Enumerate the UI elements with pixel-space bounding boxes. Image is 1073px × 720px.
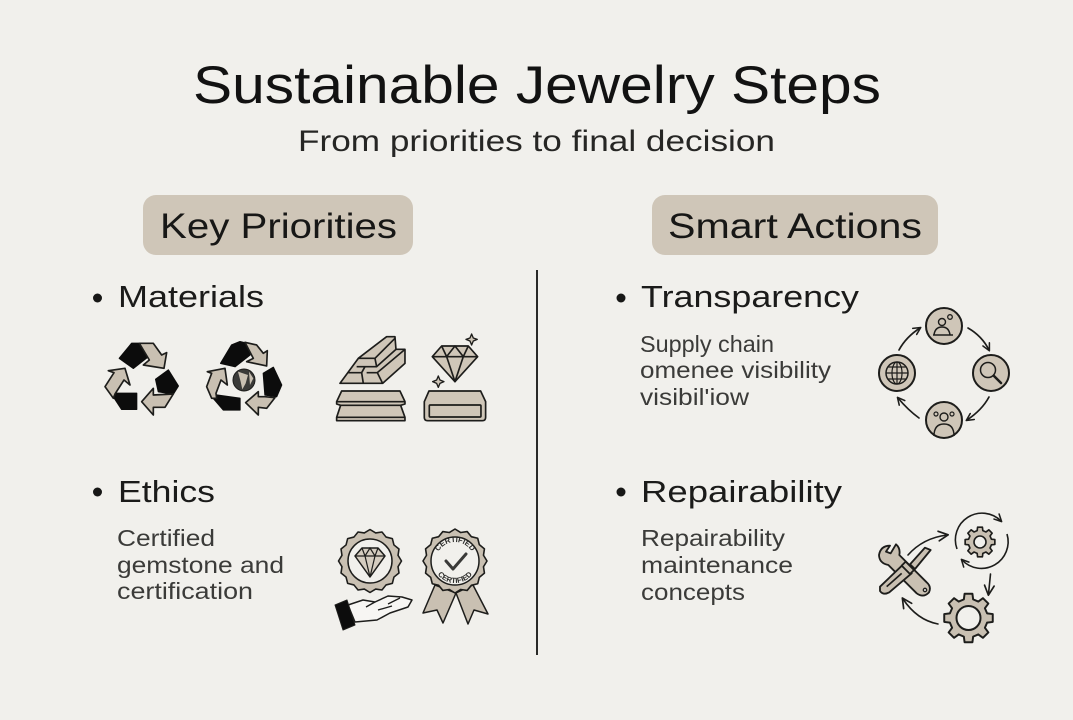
icon: open hand (335, 596, 412, 630)
arrows: repair cycle (903, 535, 990, 624)
body text: repairability: Repairability (641, 525, 785, 551)
body text: repairability: concepts (641, 579, 745, 605)
panel: repairability (616, 474, 1008, 642)
body text: transparency (640, 331, 831, 410)
body text: transparency: omenee visibility (640, 357, 831, 383)
heading: Key Priorities (143, 195, 413, 255)
icon: magnifier node (973, 355, 1009, 391)
body text: repairability: maintenance (641, 552, 793, 578)
heading: repairability: Repairability (641, 474, 843, 509)
heading: Smart Actions (652, 195, 938, 255)
icon: globe node (879, 355, 915, 391)
bullet: ethics (93, 488, 102, 496)
heading: Smart Actions: Smart Actions (668, 207, 922, 246)
bullet: materials (93, 294, 102, 302)
body text: repairability (641, 525, 793, 605)
body text: ethics (117, 525, 284, 604)
icon: crossed wrench and screwdriver (879, 544, 931, 596)
icon: flat ingot (337, 391, 405, 421)
heading: ethics: Ethics (118, 474, 215, 509)
panel: ethics (93, 474, 489, 630)
icon: people node (926, 402, 962, 438)
body text: transparency: visibil'iow (640, 384, 750, 410)
panel: transparency (616, 279, 1009, 438)
icon: diamond seal (338, 530, 402, 592)
icon: diamond with sparkles (432, 334, 478, 387)
heading: materials: Materials (118, 279, 264, 314)
icon: certified ribbon badge (422, 528, 489, 625)
body text: transparency: Supply chain (640, 331, 774, 357)
arrows: transparency cycle (898, 328, 989, 420)
center divider (536, 270, 538, 655)
icon: large gear (944, 594, 993, 642)
icon: stacked gold bars (340, 337, 405, 383)
body text: ethics: gemstone and (117, 552, 284, 578)
body text: ethics: certification (117, 578, 253, 604)
icon: certified ribbon badge: CERTIFIED (438, 572, 472, 583)
icon: rotating gear (955, 513, 1008, 568)
icon: recycle symbol (105, 343, 178, 415)
icon: recycle symbol with globe (207, 342, 282, 415)
heading: transparency: Transparency (641, 279, 860, 314)
title: Sustainable Jewelry Steps (193, 56, 881, 115)
body text: ethics: Certified (117, 525, 215, 551)
subtitle: From priorities to final decision (298, 125, 775, 158)
icon: bar block (424, 391, 486, 421)
panel: materials (93, 279, 486, 421)
heading: Key Priorities: Key Priorities (160, 207, 397, 246)
bullet: repairability (616, 488, 626, 496)
bullet: transparency (616, 294, 626, 302)
icon: top person node (926, 308, 962, 344)
icon: certified ribbon badge: CERTIFIED (436, 537, 474, 550)
